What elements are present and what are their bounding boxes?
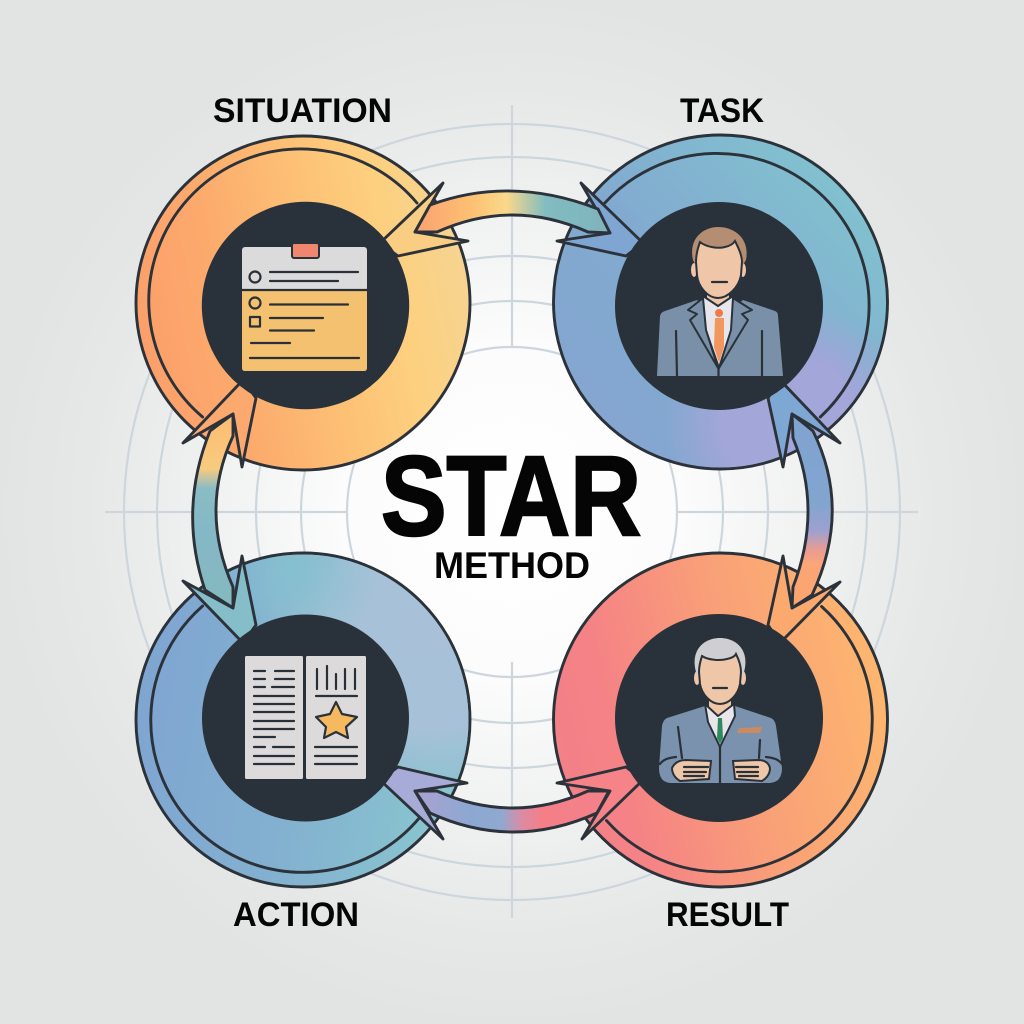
- arrow: action and result: [380, 767, 643, 839]
- subtitle: METHOD: METHOD: [434, 545, 590, 586]
- label: situation: SITUATION: [213, 92, 392, 130]
- arrow: situation and action: [183, 380, 256, 643]
- label: task: TASK: [680, 92, 764, 130]
- title: STAR: STAR: [381, 433, 641, 559]
- ring: action: [136, 553, 470, 887]
- label: result: RESULT: [666, 896, 789, 934]
- ring: result: [554, 553, 888, 887]
- icon: result person: [615, 614, 823, 822]
- icon: action book: [202, 614, 409, 822]
- icon: task person: [615, 202, 823, 410]
- label: action: ACTION: [233, 896, 359, 934]
- icon: situation clipboard: [202, 202, 409, 409]
- background concentric grid: [105, 105, 918, 918]
- arrow: task and result: [768, 380, 840, 643]
- ring: task: [554, 135, 888, 469]
- ring: situation: [136, 136, 470, 470]
- arrow: situation and task: [380, 183, 643, 256]
